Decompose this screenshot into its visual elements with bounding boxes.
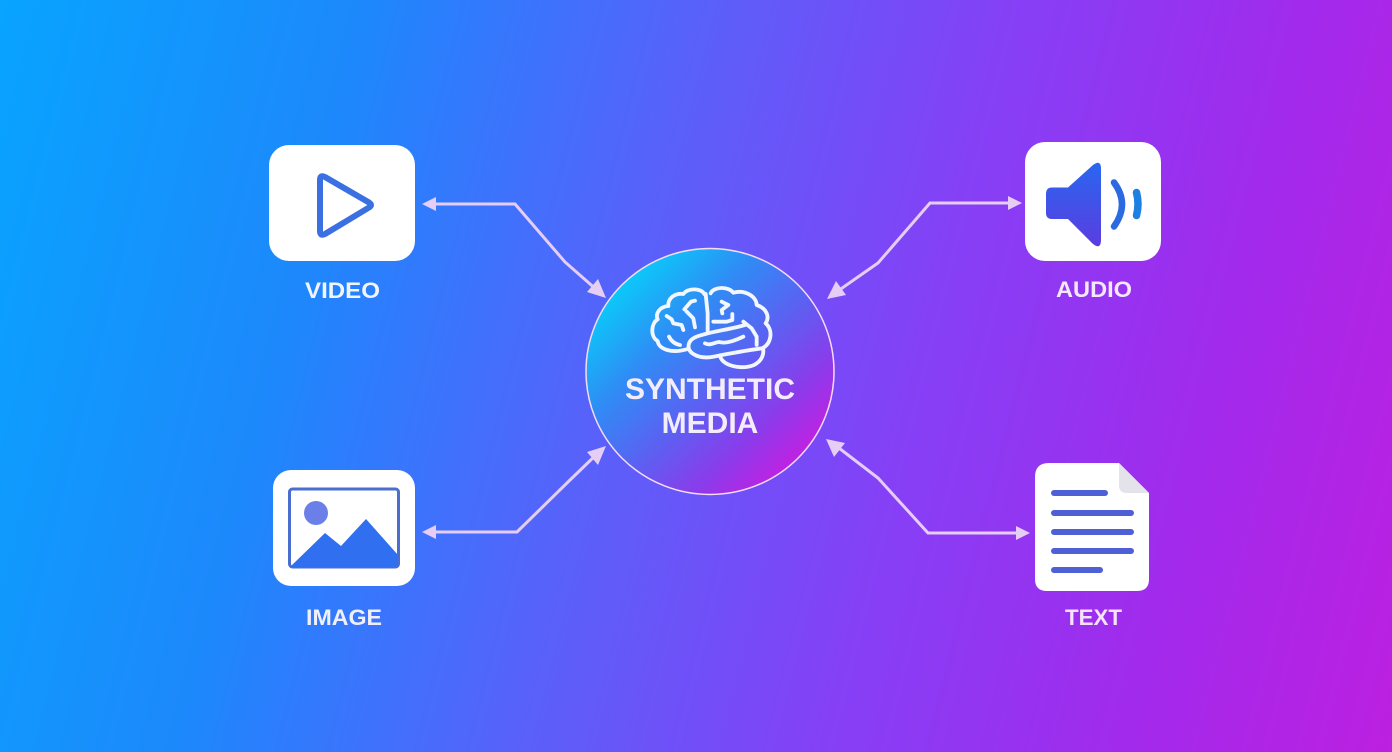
image card (273, 470, 415, 586)
icon: play button (320, 176, 371, 235)
label: audio: AUDIO (1056, 277, 1132, 302)
document fold (1119, 463, 1149, 493)
audio card (1025, 142, 1161, 261)
document page (1035, 463, 1149, 591)
document lines (1054, 493, 1131, 570)
arrow: text to synthetic media (826, 439, 1030, 540)
panel: video (269, 145, 415, 303)
label: text: TEXT (1065, 605, 1123, 630)
panel: audio (1025, 142, 1161, 302)
arrow: image to synthetic media (422, 446, 606, 539)
icon: speaker (1046, 163, 1138, 246)
hub circle (586, 248, 834, 494)
panel: synthetic media hub: MEDIA (662, 407, 758, 440)
icon: brain (652, 288, 770, 367)
panel: synthetic media hub (586, 248, 834, 494)
label: video: VIDEO (305, 278, 380, 303)
arrow: video to synthetic media (422, 197, 606, 298)
hub title: SYNTHETIC (625, 373, 795, 406)
label: image: IMAGE (306, 605, 382, 630)
arrow: audio to synthetic media (827, 196, 1022, 299)
panel: text (1035, 463, 1149, 630)
panel: image (273, 470, 415, 630)
video card (269, 145, 415, 261)
icon: picture (290, 489, 398, 567)
